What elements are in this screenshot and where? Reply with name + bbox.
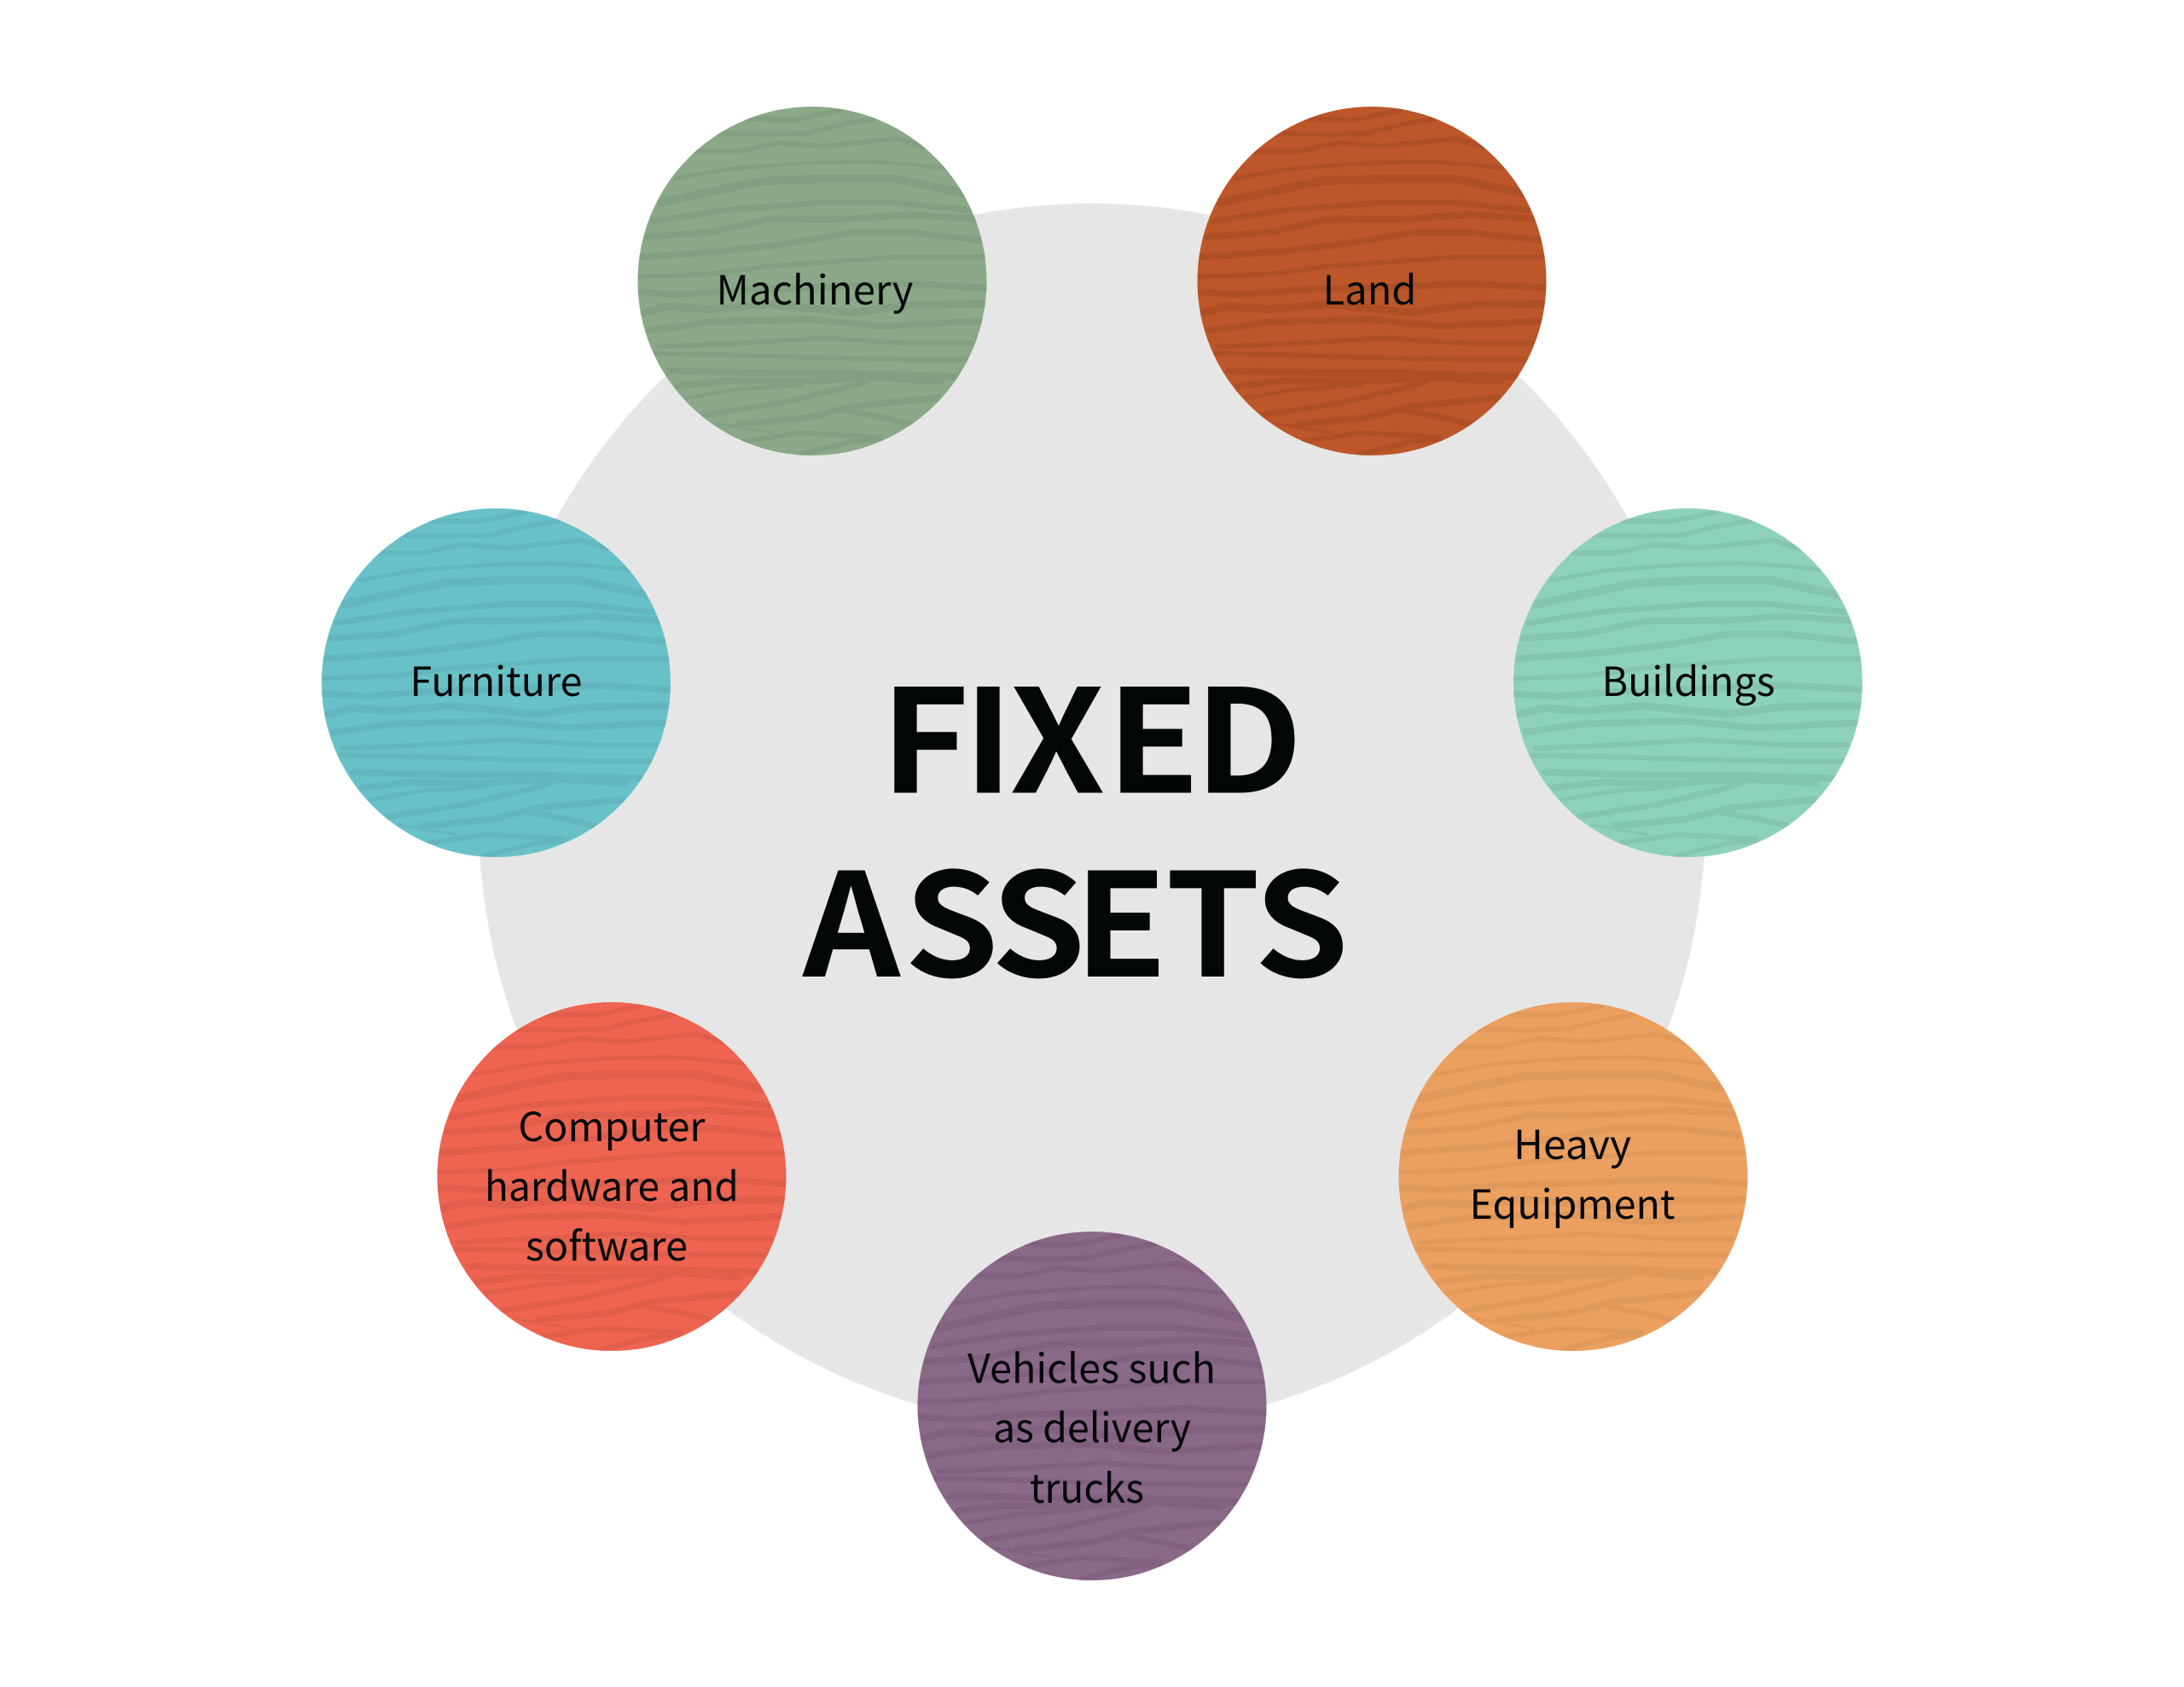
circle: buildings: Buildings bbox=[1602, 649, 1774, 708]
circle: vehicles such as delivery trucks: Vehicles such bbox=[967, 1336, 1216, 1395]
circle: vehicles such as delivery trucks: as delivery bbox=[993, 1395, 1191, 1454]
circle: land bbox=[1198, 107, 1546, 455]
circle: computer hardware and software: Computer bbox=[519, 1094, 706, 1153]
circle: buildings bbox=[1513, 508, 1862, 857]
title: fixed assets: ASSETS bbox=[802, 810, 1349, 1018]
circle: computer hardware and software bbox=[437, 1002, 787, 1351]
circle: machinery: Machinery bbox=[717, 258, 913, 316]
circle: furniture: Furniture bbox=[410, 649, 582, 708]
circle: machinery bbox=[638, 107, 986, 455]
title: fixed assets: FIXED bbox=[880, 626, 1303, 834]
circle: vehicles such as delivery trucks: trucks bbox=[1030, 1456, 1144, 1515]
circle: heavy equipment: Heavy bbox=[1513, 1112, 1631, 1171]
circle: computer hardware and software: software bbox=[526, 1214, 688, 1272]
circle: furniture bbox=[322, 508, 671, 857]
circle: vehicles such as delivery trucks bbox=[918, 1232, 1266, 1580]
title: fixed assets bbox=[802, 626, 1349, 1018]
circle: computer hardware and software: hardware and bbox=[485, 1154, 739, 1213]
circle: heavy equipment bbox=[1399, 1002, 1747, 1351]
central disc bbox=[479, 203, 1705, 1429]
circle: heavy equipment: Equipment bbox=[1469, 1172, 1676, 1231]
circle: land: Land bbox=[1322, 258, 1416, 316]
